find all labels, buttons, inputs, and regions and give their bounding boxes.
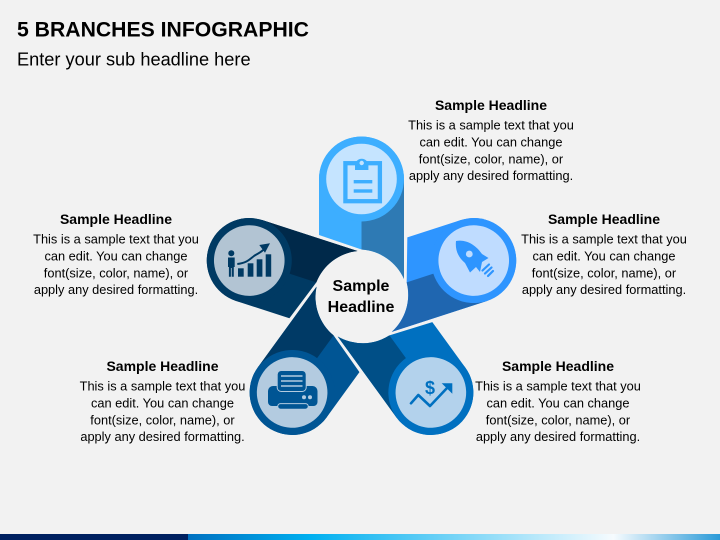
text block: left: font(size, color, name), or	[44, 265, 189, 280]
text block: top	[408, 97, 574, 183]
text block: right	[521, 211, 687, 297]
text block: right: Sample Headline	[548, 211, 660, 227]
text block: bottom right: This is a sample text that you	[475, 378, 641, 394]
subtitle: Enter your sub headline here	[17, 50, 251, 70]
text block: bottom right: can edit. You can change	[486, 396, 630, 410]
text block: left: Sample Headline	[60, 211, 172, 227]
text block: bottom left: This is a sample text that you	[80, 378, 245, 394]
branch: left	[196, 207, 358, 332]
icon: dollar trend arrow	[411, 378, 452, 406]
branch: bottom right	[338, 287, 490, 452]
text block: right: font(size, color, name), or	[532, 265, 677, 280]
text block: right: apply any desired formatting.	[522, 282, 686, 297]
text block: bottom left: Sample Headline	[106, 358, 219, 374]
text block: top: Sample Headline	[435, 97, 547, 113]
text block: bottom right: apply any desired formatting.	[476, 429, 640, 444]
center circle: Sample	[333, 278, 390, 295]
text block: bottom left: font(size, color, name), or	[90, 412, 235, 427]
branch: top	[319, 136, 404, 279]
text block: bottom right: font(size, color, name), or	[486, 412, 631, 427]
text block: right: This is a sample text that you	[521, 232, 687, 246]
title: 5 BRANCHES INFOGRAPHIC	[17, 18, 309, 42]
text block: top: apply any desired formatting.	[409, 168, 573, 183]
text block: left: can edit. You can change	[44, 248, 188, 264]
text block: top: This is a sample text that you	[408, 118, 574, 132]
center circle: Headline	[328, 299, 394, 316]
icon: rocket	[456, 241, 493, 276]
text block: bottom right: Sample Headline	[502, 358, 614, 374]
icon: printer	[268, 370, 318, 409]
branch: right	[365, 207, 527, 332]
footer bar	[0, 534, 720, 540]
icon: growth chart with person	[228, 243, 271, 277]
icon: dollar trend arrow: $	[425, 378, 435, 398]
text block: top: can edit. You can change	[419, 134, 563, 150]
text block: top: font(size, color, name), or	[419, 151, 564, 166]
center circle	[316, 252, 405, 341]
branch: bottom left	[233, 287, 385, 452]
text block: bottom left: apply any desired formatting.	[80, 429, 245, 444]
text block: left: apply any desired formatting.	[34, 282, 198, 297]
text block: bottom left: can edit. You can change	[91, 396, 234, 410]
text block: right: can edit. You can change	[532, 248, 676, 264]
text block: left: This is a sample text that you	[33, 232, 199, 246]
text block: bottom left	[80, 358, 245, 444]
text block: bottom right	[475, 358, 641, 444]
text block: left	[33, 211, 199, 297]
icon: clipboard	[345, 159, 380, 201]
